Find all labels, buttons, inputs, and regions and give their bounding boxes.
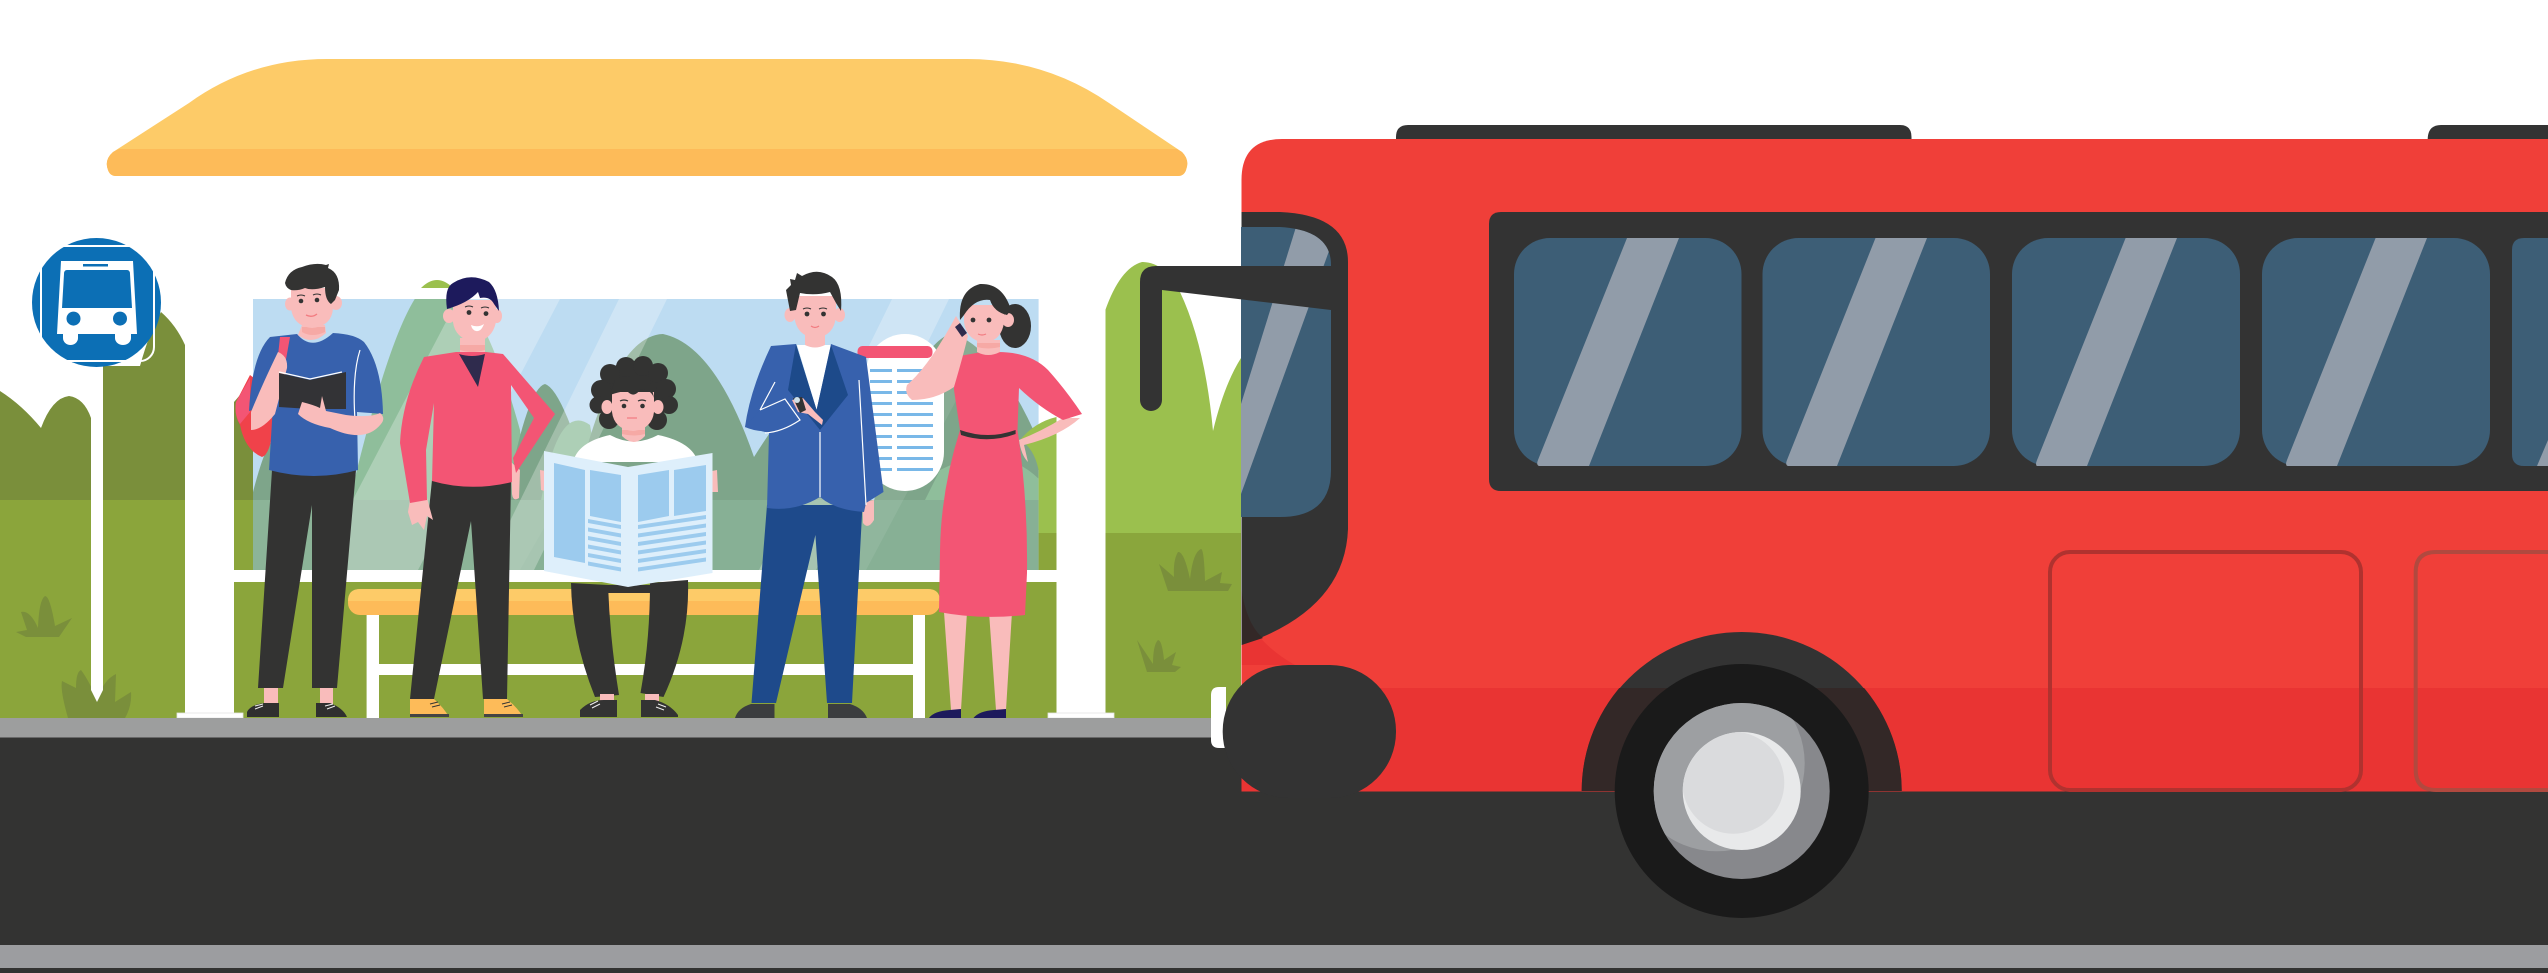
- head: [784, 308, 796, 322]
- newspaper: [544, 451, 712, 587]
- pavement: [0, 718, 1222, 738]
- windscreen glass: [1241, 227, 1333, 517]
- left arm: [251, 352, 287, 430]
- neck: [622, 425, 645, 442]
- hand: [862, 500, 874, 526]
- shoes: [929, 709, 1006, 718]
- right forearm: [298, 396, 383, 435]
- t-shirt: [249, 333, 383, 476]
- timetable board: [858, 334, 944, 491]
- grass tufts: [16, 549, 1232, 718]
- window 4: [2262, 238, 2490, 466]
- sign pole: [91, 360, 103, 702]
- icon: bus front: [57, 261, 137, 345]
- jacket: [745, 344, 884, 512]
- roof units: [1396, 125, 2548, 139]
- hands: [408, 498, 433, 530]
- legs: [944, 612, 1012, 710]
- window 3: [2012, 238, 2240, 466]
- shirt: [797, 345, 831, 410]
- shoes: [247, 703, 347, 717]
- shelter roof: [107, 59, 1187, 176]
- hair bun: [999, 304, 1031, 348]
- person: man in blue t-shirt reading a book: [236, 264, 383, 717]
- door panel 2: [2416, 552, 2548, 790]
- bus body: [1242, 139, 2548, 792]
- person: businessman in blue suit checking watch: [735, 272, 884, 718]
- neck: [977, 340, 1000, 355]
- head: [602, 400, 612, 414]
- sign frame: [41, 246, 154, 361]
- phone: [955, 323, 967, 337]
- glass back panel with hills: [253, 299, 1039, 570]
- bench: [348, 589, 940, 718]
- background landscape: left hills and grass: [0, 280, 1057, 718]
- head: [1002, 313, 1014, 327]
- trousers: [752, 505, 862, 703]
- bag strap: [277, 337, 290, 365]
- door panel 1: [2050, 552, 2361, 790]
- sign disc: [32, 238, 161, 367]
- window 1: [1514, 238, 1742, 466]
- background landscape: right hill between shelter and bus: [1105, 262, 1241, 718]
- neck: [460, 338, 485, 352]
- legs: [264, 685, 333, 704]
- right side leaf of hill: [1020, 417, 1057, 570]
- legs: [571, 580, 688, 697]
- roof brackets: [185, 208, 1106, 238]
- bag: [236, 375, 274, 457]
- road: [0, 738, 2548, 973]
- side mirror: [1140, 266, 1348, 411]
- glass reflections: [316, 299, 1010, 570]
- shoes: [410, 699, 523, 717]
- book: [279, 372, 346, 409]
- window 5: [2512, 238, 2548, 466]
- dress: [939, 352, 1082, 617]
- raised arm: [906, 316, 968, 400]
- belt: [960, 430, 1016, 439]
- bus: [1211, 125, 2548, 918]
- watch and hand: [792, 398, 823, 425]
- windscreen frame: [1242, 212, 1348, 645]
- t-shirt: [573, 435, 698, 462]
- head: [285, 298, 295, 310]
- shirt collar: [459, 354, 485, 387]
- sleeve: [745, 400, 799, 431]
- shoes: [580, 700, 678, 717]
- sweater: [400, 352, 555, 503]
- shelter pillars and rail: [177, 176, 1114, 718]
- neck: [298, 325, 326, 340]
- wheel: [1581, 632, 1903, 918]
- head: [443, 309, 455, 323]
- person: man in pink sweater: [400, 277, 555, 717]
- neck: [805, 335, 825, 348]
- side window band: [1489, 212, 2548, 491]
- hair back: [590, 356, 678, 430]
- legs: [410, 480, 511, 699]
- person: woman in pink dress on the phone: [906, 284, 1082, 718]
- lapels: [788, 344, 848, 430]
- shoes: [735, 704, 867, 718]
- bus stop sign: [32, 238, 161, 702]
- person: seated reader with newspaper: [540, 356, 718, 717]
- headlight: [1211, 687, 1226, 748]
- hands: [540, 470, 718, 493]
- front bumper: [1223, 665, 1396, 798]
- lower body band: [1242, 688, 2548, 792]
- window 2: [1762, 238, 1990, 466]
- left forearm on hip: [1019, 418, 1080, 462]
